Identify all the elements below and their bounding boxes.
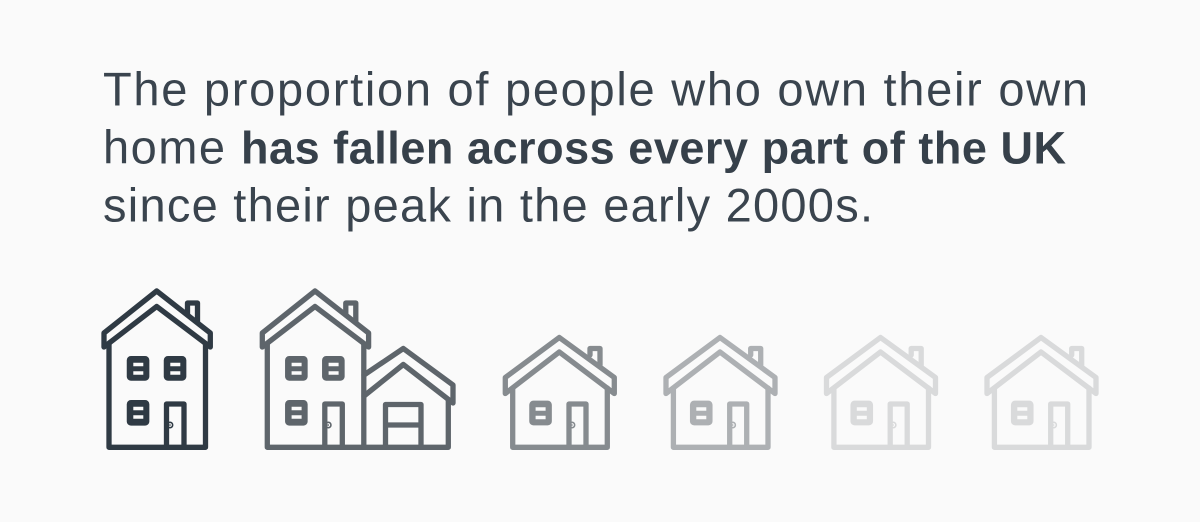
icon: small house, light grey [826,338,936,447]
icon: small house, lightest grey [987,338,1096,447]
heading text: home [103,120,225,174]
heading text [103,62,1088,232]
icon: small house, dark grey [505,338,614,447]
heading text: has fallen across every part of the UK [241,122,1066,174]
icon: tall house with garage [262,291,453,447]
icon: small house, mid grey [666,338,775,447]
icon: tall house [104,291,210,447]
heading text: since their peak in the early 2000s. [103,178,873,232]
heading text: The proportion of people who own their own [103,62,1088,116]
garage [364,348,453,447]
